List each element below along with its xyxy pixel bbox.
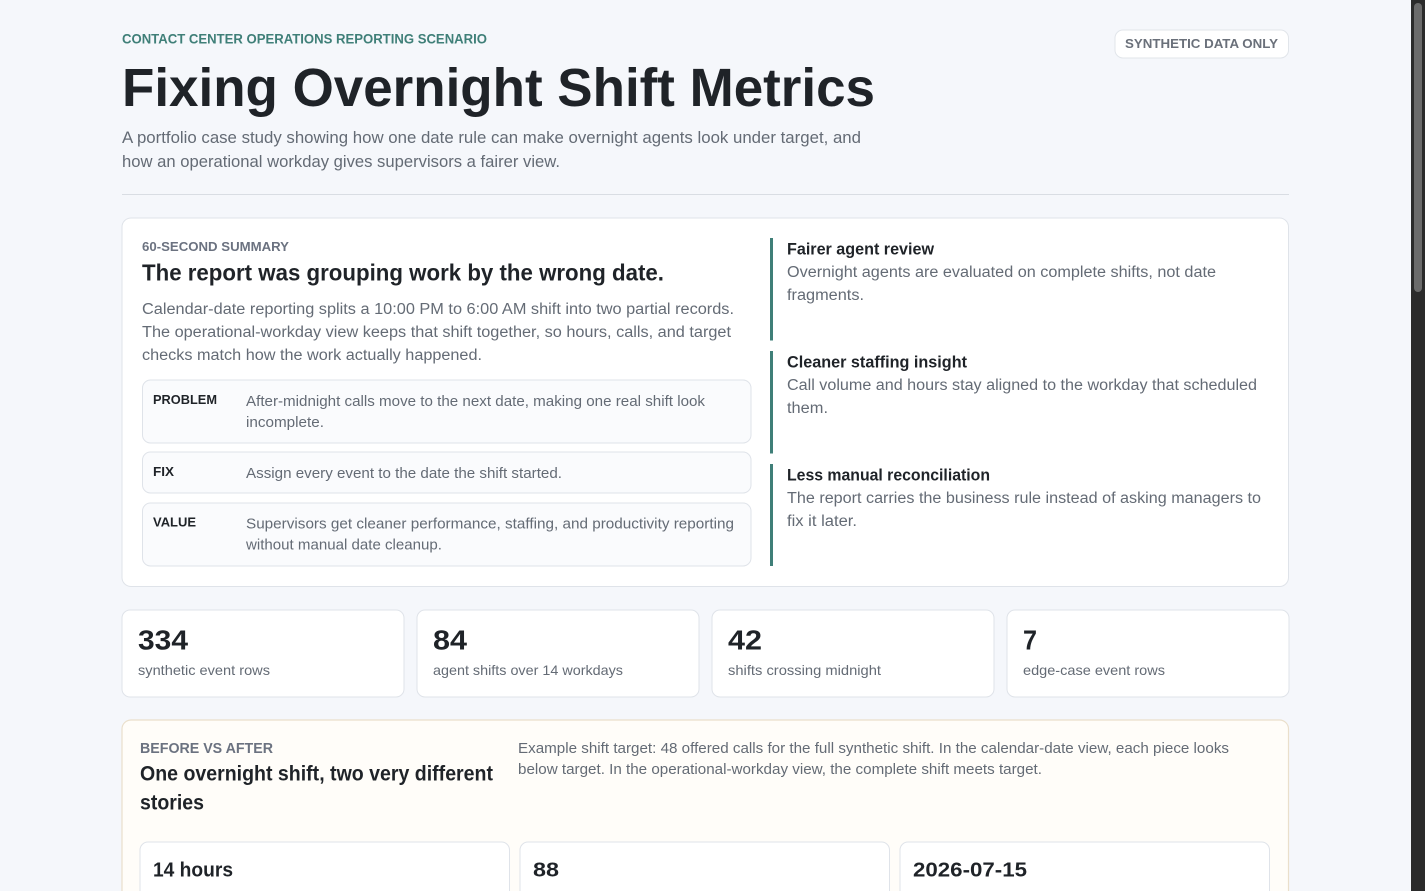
stat: shifts crossing midnight: 42 bbox=[728, 624, 762, 656]
card: 2026-07-15 bbox=[900, 842, 1270, 891]
benefit: fairer agent review: fragments. bbox=[787, 287, 864, 304]
panel: 60-second summary bbox=[122, 218, 1288, 586]
scrollbar bbox=[1411, 0, 1425, 891]
benefit: cleaner staffing insight: them. bbox=[787, 400, 828, 417]
stat: shifts crossing midnight bbox=[712, 610, 994, 697]
card: 88: 88 bbox=[533, 858, 559, 882]
row: fix bbox=[142, 452, 751, 493]
subtitle: how an operational workday gives supervisors a fairer view. bbox=[122, 153, 560, 171]
stat: edge-case event rows: edge-case event rows bbox=[1023, 662, 1165, 678]
row: value: Supervisors get cleaner performance, staffing, and productivity reporting bbox=[246, 516, 734, 532]
panel: before vs after bbox=[122, 720, 1288, 891]
benefit: less manual reconciliation: The report carries the business rule instead of asking managers to bbox=[787, 490, 1261, 507]
benefit: cleaner staffing insight: Call volume and hours stay aligned to the workday that scheduled bbox=[787, 377, 1257, 394]
summary paragraph bbox=[142, 301, 734, 364]
row: problem bbox=[142, 380, 751, 443]
subtitle bbox=[122, 129, 861, 171]
row: value: VALUE bbox=[153, 516, 196, 530]
stat: edge-case event rows: 7 bbox=[1023, 624, 1037, 656]
card: 2026-07-15: 2026-07-15 bbox=[913, 858, 1027, 882]
stat: agent shifts: 84 bbox=[433, 624, 468, 656]
row: problem: After-midnight calls move to the next date, making one real shift look bbox=[246, 394, 706, 410]
subtitle: A portfolio case study showing how one date rule can make overnight agents look under target, and bbox=[122, 129, 861, 147]
summary paragraph: The operational-workday view keeps that shift together, so hours, calls, and target bbox=[142, 324, 732, 341]
section note: Example shift target: 48 offered calls for the full synthetic shift. In the calendar-date view, each piece looks bbox=[518, 741, 1229, 757]
benefit: fairer agent review: Overnight agents are evaluated on complete shifts, not date bbox=[787, 264, 1216, 281]
summary label: 60-SECOND SUMMARY bbox=[142, 240, 290, 254]
benefit: cleaner staffing insight bbox=[770, 351, 1257, 454]
stat: agent shifts bbox=[417, 610, 699, 697]
benefit: less manual reconciliation: Less manual reconciliation bbox=[787, 466, 990, 484]
stat: agent shifts: agent shifts over 14 workdays bbox=[433, 662, 623, 678]
row: problem: incomplete. bbox=[246, 415, 324, 431]
card: 14 hours bbox=[140, 842, 510, 891]
benefit: less manual reconciliation bbox=[770, 464, 1261, 566]
summary paragraph: Calendar-date reporting splits a 10:00 PM to 6:00 AM shift into two partial records. bbox=[142, 301, 734, 318]
card: 14 hours: 14 hours bbox=[153, 858, 233, 882]
benefit: cleaner staffing insight: Cleaner staffing insight bbox=[787, 354, 967, 372]
section heading bbox=[140, 762, 493, 814]
row: fix: FIX bbox=[153, 465, 175, 479]
title: Fixing Overnight Shift Metrics bbox=[122, 58, 875, 118]
section note: below target. In the operational-workday view, the complete shift meets target. bbox=[518, 762, 1042, 778]
stat: synthetic event rows: synthetic event rows bbox=[138, 662, 270, 678]
stat: synthetic event rows: 334 bbox=[138, 624, 189, 656]
badge: synthetic data only: SYNTHETIC DATA ONLY bbox=[1125, 37, 1279, 51]
stat: synthetic event rows bbox=[122, 610, 404, 697]
section heading: One overnight shift, two very different bbox=[140, 762, 493, 786]
section heading: stories bbox=[140, 792, 204, 814]
badge: synthetic data only bbox=[1115, 30, 1288, 58]
stat: shifts crossing midnight: shifts crossing midnight bbox=[728, 662, 881, 678]
eyebrow label: CONTACT CENTER OPERATIONS REPORTING SCENARIO bbox=[122, 32, 487, 46]
benefit: fairer agent review: Fairer agent review bbox=[787, 240, 934, 258]
summary heading: The report was grouping work by the wrong date. bbox=[142, 260, 664, 286]
row: problem: PROBLEM bbox=[153, 393, 217, 407]
benefit: fairer agent review bbox=[770, 238, 1216, 340]
row: value: without manual date cleanup. bbox=[245, 538, 442, 554]
summary paragraph: checks match how the work actually happened. bbox=[142, 347, 482, 364]
page header bbox=[122, 32, 875, 171]
section note bbox=[518, 741, 1229, 778]
row: value bbox=[142, 503, 751, 566]
row: fix: Assign every event to the date the shift started. bbox=[246, 466, 562, 482]
stat: edge-case event rows bbox=[1007, 610, 1289, 697]
card: 88 bbox=[520, 842, 890, 891]
section label: BEFORE VS AFTER bbox=[140, 741, 274, 757]
benefit: less manual reconciliation: fix it later. bbox=[787, 513, 857, 530]
